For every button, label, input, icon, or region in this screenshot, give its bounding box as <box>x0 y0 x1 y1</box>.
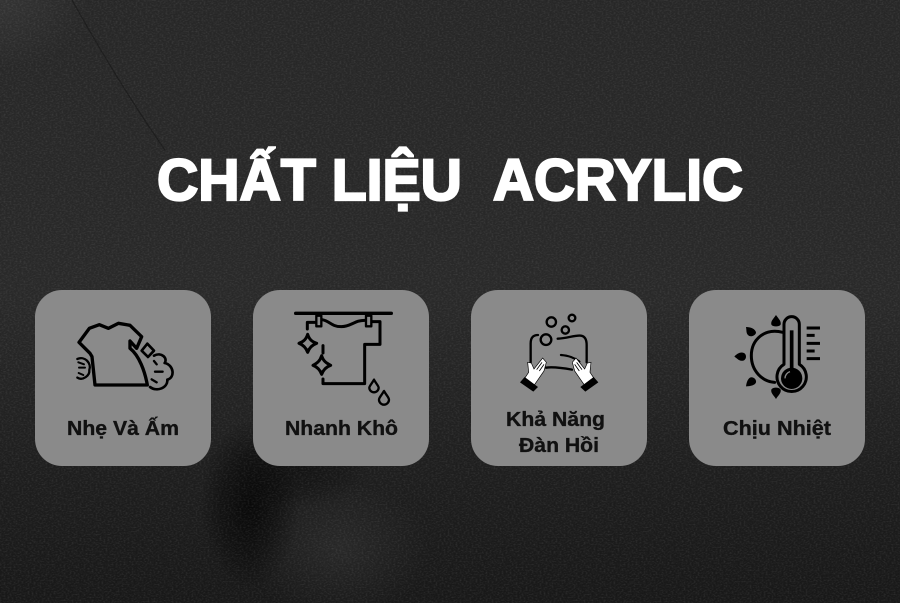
title: CHẤT LIỆU <box>157 148 462 213</box>
label: Khả Năng <box>506 409 605 431</box>
icon: hands stretching fabric with bubbles <box>520 315 598 392</box>
label: Đàn Hồi <box>519 435 599 457</box>
title <box>157 148 743 213</box>
label <box>506 409 605 457</box>
panel: Chịu Nhiệt <box>689 290 865 466</box>
panel: Nhẹ Và Ấm <box>35 290 211 466</box>
icon: quick-dry shirt on line <box>296 313 391 405</box>
label: Nhanh Khô <box>285 418 398 440</box>
panel: Nhanh Khô <box>253 290 429 466</box>
title: ACRYLIC <box>493 148 743 213</box>
icon: sun and thermometer <box>734 315 820 399</box>
panel: Khả Năng Đàn Hồi <box>471 290 647 466</box>
label: Chịu Nhiệt <box>723 418 831 440</box>
label: Nhẹ Và Ấm <box>67 417 179 440</box>
icon: light warm t-shirt <box>77 323 173 389</box>
